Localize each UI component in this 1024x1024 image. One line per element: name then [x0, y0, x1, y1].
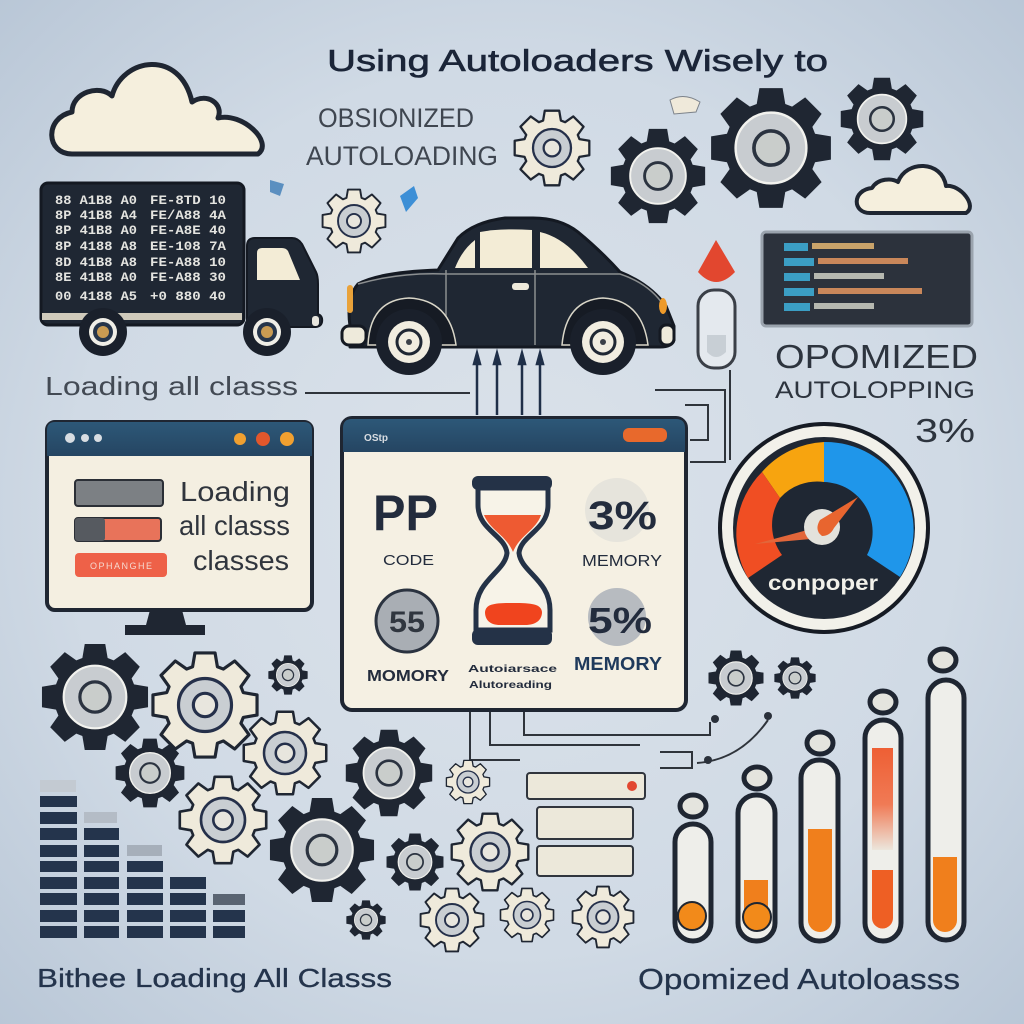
- icon: small cloud: [857, 166, 970, 213]
- panel: center browser window: MEMORY: [574, 654, 662, 674]
- arrows up to car: [474, 353, 543, 415]
- panel: left browser window: OPHANGHE: [90, 561, 152, 571]
- icon: truck with class list: FE/A88 4A: [150, 208, 226, 223]
- gauge label: conpoper: [768, 572, 878, 595]
- icon: top gears: [323, 78, 923, 252]
- text: stats: 5%: [588, 600, 652, 641]
- subtitle: optimized autoloading: AUTOLOADING: [306, 141, 498, 171]
- footer label right: Opomized Autoloasss: [638, 964, 960, 996]
- icon: truck with class list: 8D 41B8 A8: [55, 255, 137, 270]
- text: stats: 3%: [588, 494, 657, 538]
- icon: truck with class list: +0 880 40: [150, 289, 226, 304]
- icon: truck with class list: 8P 41B8 A4: [55, 208, 137, 223]
- chart: thermometer bars: [675, 649, 964, 941]
- panel: code screen: [762, 232, 972, 326]
- text: stats: [367, 478, 662, 691]
- icon: truck with class list: 8P 4188 A8: [55, 239, 137, 254]
- icon: truck with class list: FE-A8E 40: [150, 223, 226, 238]
- panel: small stacked cards: [527, 773, 645, 876]
- text: stats: PP: [373, 485, 438, 541]
- subtitle: optimized autoloading: [306, 103, 498, 171]
- label: optimized autolopping: AUTOLOPPING: [775, 377, 975, 404]
- bar 2: [738, 767, 775, 941]
- label: loading all classes: Loading all classs: [45, 371, 298, 401]
- icon: red drop and tube: [698, 240, 735, 368]
- decorative fragments: [270, 96, 700, 212]
- connector lines: [305, 370, 768, 768]
- icon: car: [342, 218, 674, 375]
- text: stats: MOMORY: [367, 668, 449, 685]
- icon: truck with class list: EE-108 7A: [150, 239, 226, 254]
- panel: gauge: [720, 424, 928, 632]
- icon: truck with class list: 8E 41B8 A0: [55, 270, 137, 285]
- icon: truck with class list: FE-A88 10: [150, 255, 226, 270]
- label: optimized autolopping: 3%: [915, 412, 975, 449]
- bar 4: [865, 691, 901, 941]
- subtitle: optimized autoloading: OBSIONIZED: [318, 103, 474, 133]
- panel: center browser window: OStp: [364, 433, 388, 444]
- text: stats: Autoiarsace: [468, 664, 558, 675]
- icon: monitor stand: [125, 610, 205, 635]
- bar 1: [675, 795, 711, 941]
- text: stats: Alutoreading: [469, 680, 552, 691]
- icon: bottom gears: [42, 644, 816, 951]
- label: optimized autolopping: OPOMIZED: [775, 338, 978, 375]
- panel: left browser window: Loading: [180, 476, 290, 507]
- icon: hourglass: [472, 476, 552, 645]
- icon: truck with class list: FE-A88 30: [150, 270, 226, 285]
- bar 3: [801, 732, 838, 941]
- footer label left: Bithee Loading All Classs: [37, 963, 392, 993]
- label: optimized autolopping: [775, 338, 978, 449]
- panel: left browser window: [47, 422, 312, 610]
- chart: data grid blocks: [40, 780, 245, 938]
- text: stats: MEMORY: [582, 553, 662, 570]
- panel: left browser window: classes: [193, 545, 289, 576]
- icon: truck with class list: 88 A1B8 A0: [55, 193, 137, 208]
- title: Using Autoloaders Wisely to: [327, 43, 828, 78]
- panel: center browser window: [342, 418, 686, 710]
- icon: truck with class list: FE-8TD 10: [150, 193, 226, 208]
- panel: left browser window: all classs: [179, 510, 290, 541]
- bar 5: [928, 649, 964, 940]
- icon: truck with class list: 8P 41B8 A0: [55, 223, 137, 238]
- text: stats: 55: [389, 606, 425, 639]
- connector dots: [704, 712, 772, 764]
- icon: large cloud: [52, 64, 262, 154]
- icon: truck with class list: [41, 183, 322, 356]
- text: stats: CODE: [383, 552, 434, 569]
- icon: truck with class list: 00 4188 A5: [55, 289, 137, 304]
